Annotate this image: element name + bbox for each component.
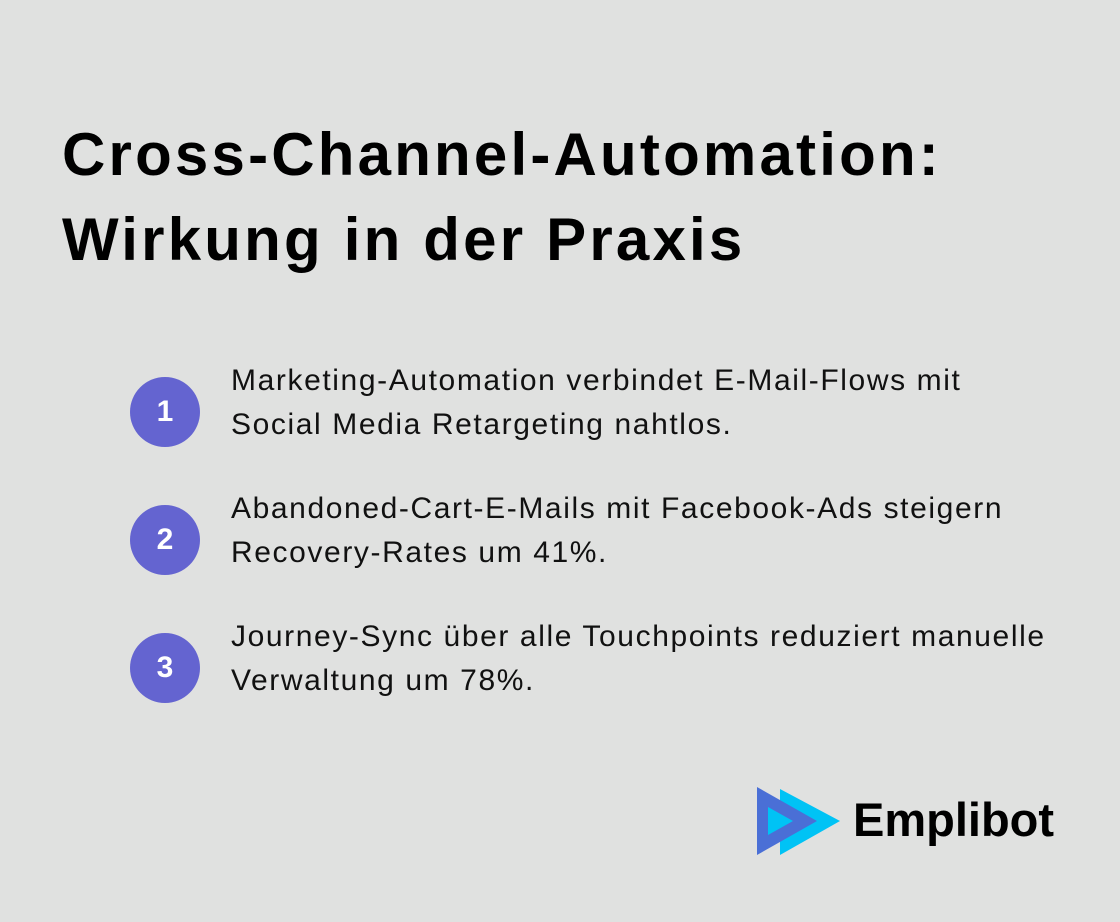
badge 3: 3 (157, 651, 173, 684)
badge 1: 1 (157, 395, 173, 428)
badge 2: 2 (157, 523, 173, 556)
item 1 (130, 364, 961, 447)
text 3: Verwaltung um 78%. (231, 664, 535, 697)
text 2 (231, 492, 1003, 569)
text 2: Recovery-Rates um 41%. (231, 536, 608, 569)
badge 3 (130, 633, 200, 703)
logo (757, 787, 1054, 855)
text 1: Marketing-Automation verbindet E-Mail-Flows mit (231, 364, 961, 397)
text 3 (231, 620, 1046, 697)
item 3 (130, 620, 1046, 703)
title: Wirkung in der Praxis (62, 206, 746, 273)
text 1 (231, 364, 961, 441)
text 2: Abandoned-Cart-E-Mails mit Facebook-Ads steigern (231, 492, 1003, 525)
text 1: Social Media Retargeting nahtlos. (231, 408, 732, 441)
title: Cross-Channel-Automation: (62, 121, 942, 188)
item 2 (130, 492, 1003, 575)
logo text: Emplibot (853, 793, 1054, 846)
badge 2 (130, 505, 200, 575)
badge 1 (130, 377, 200, 447)
icon: logo arrows (757, 787, 840, 855)
text 3: Journey-Sync über alle Touchpoints reduziert manuelle (231, 620, 1046, 653)
title (62, 121, 942, 273)
